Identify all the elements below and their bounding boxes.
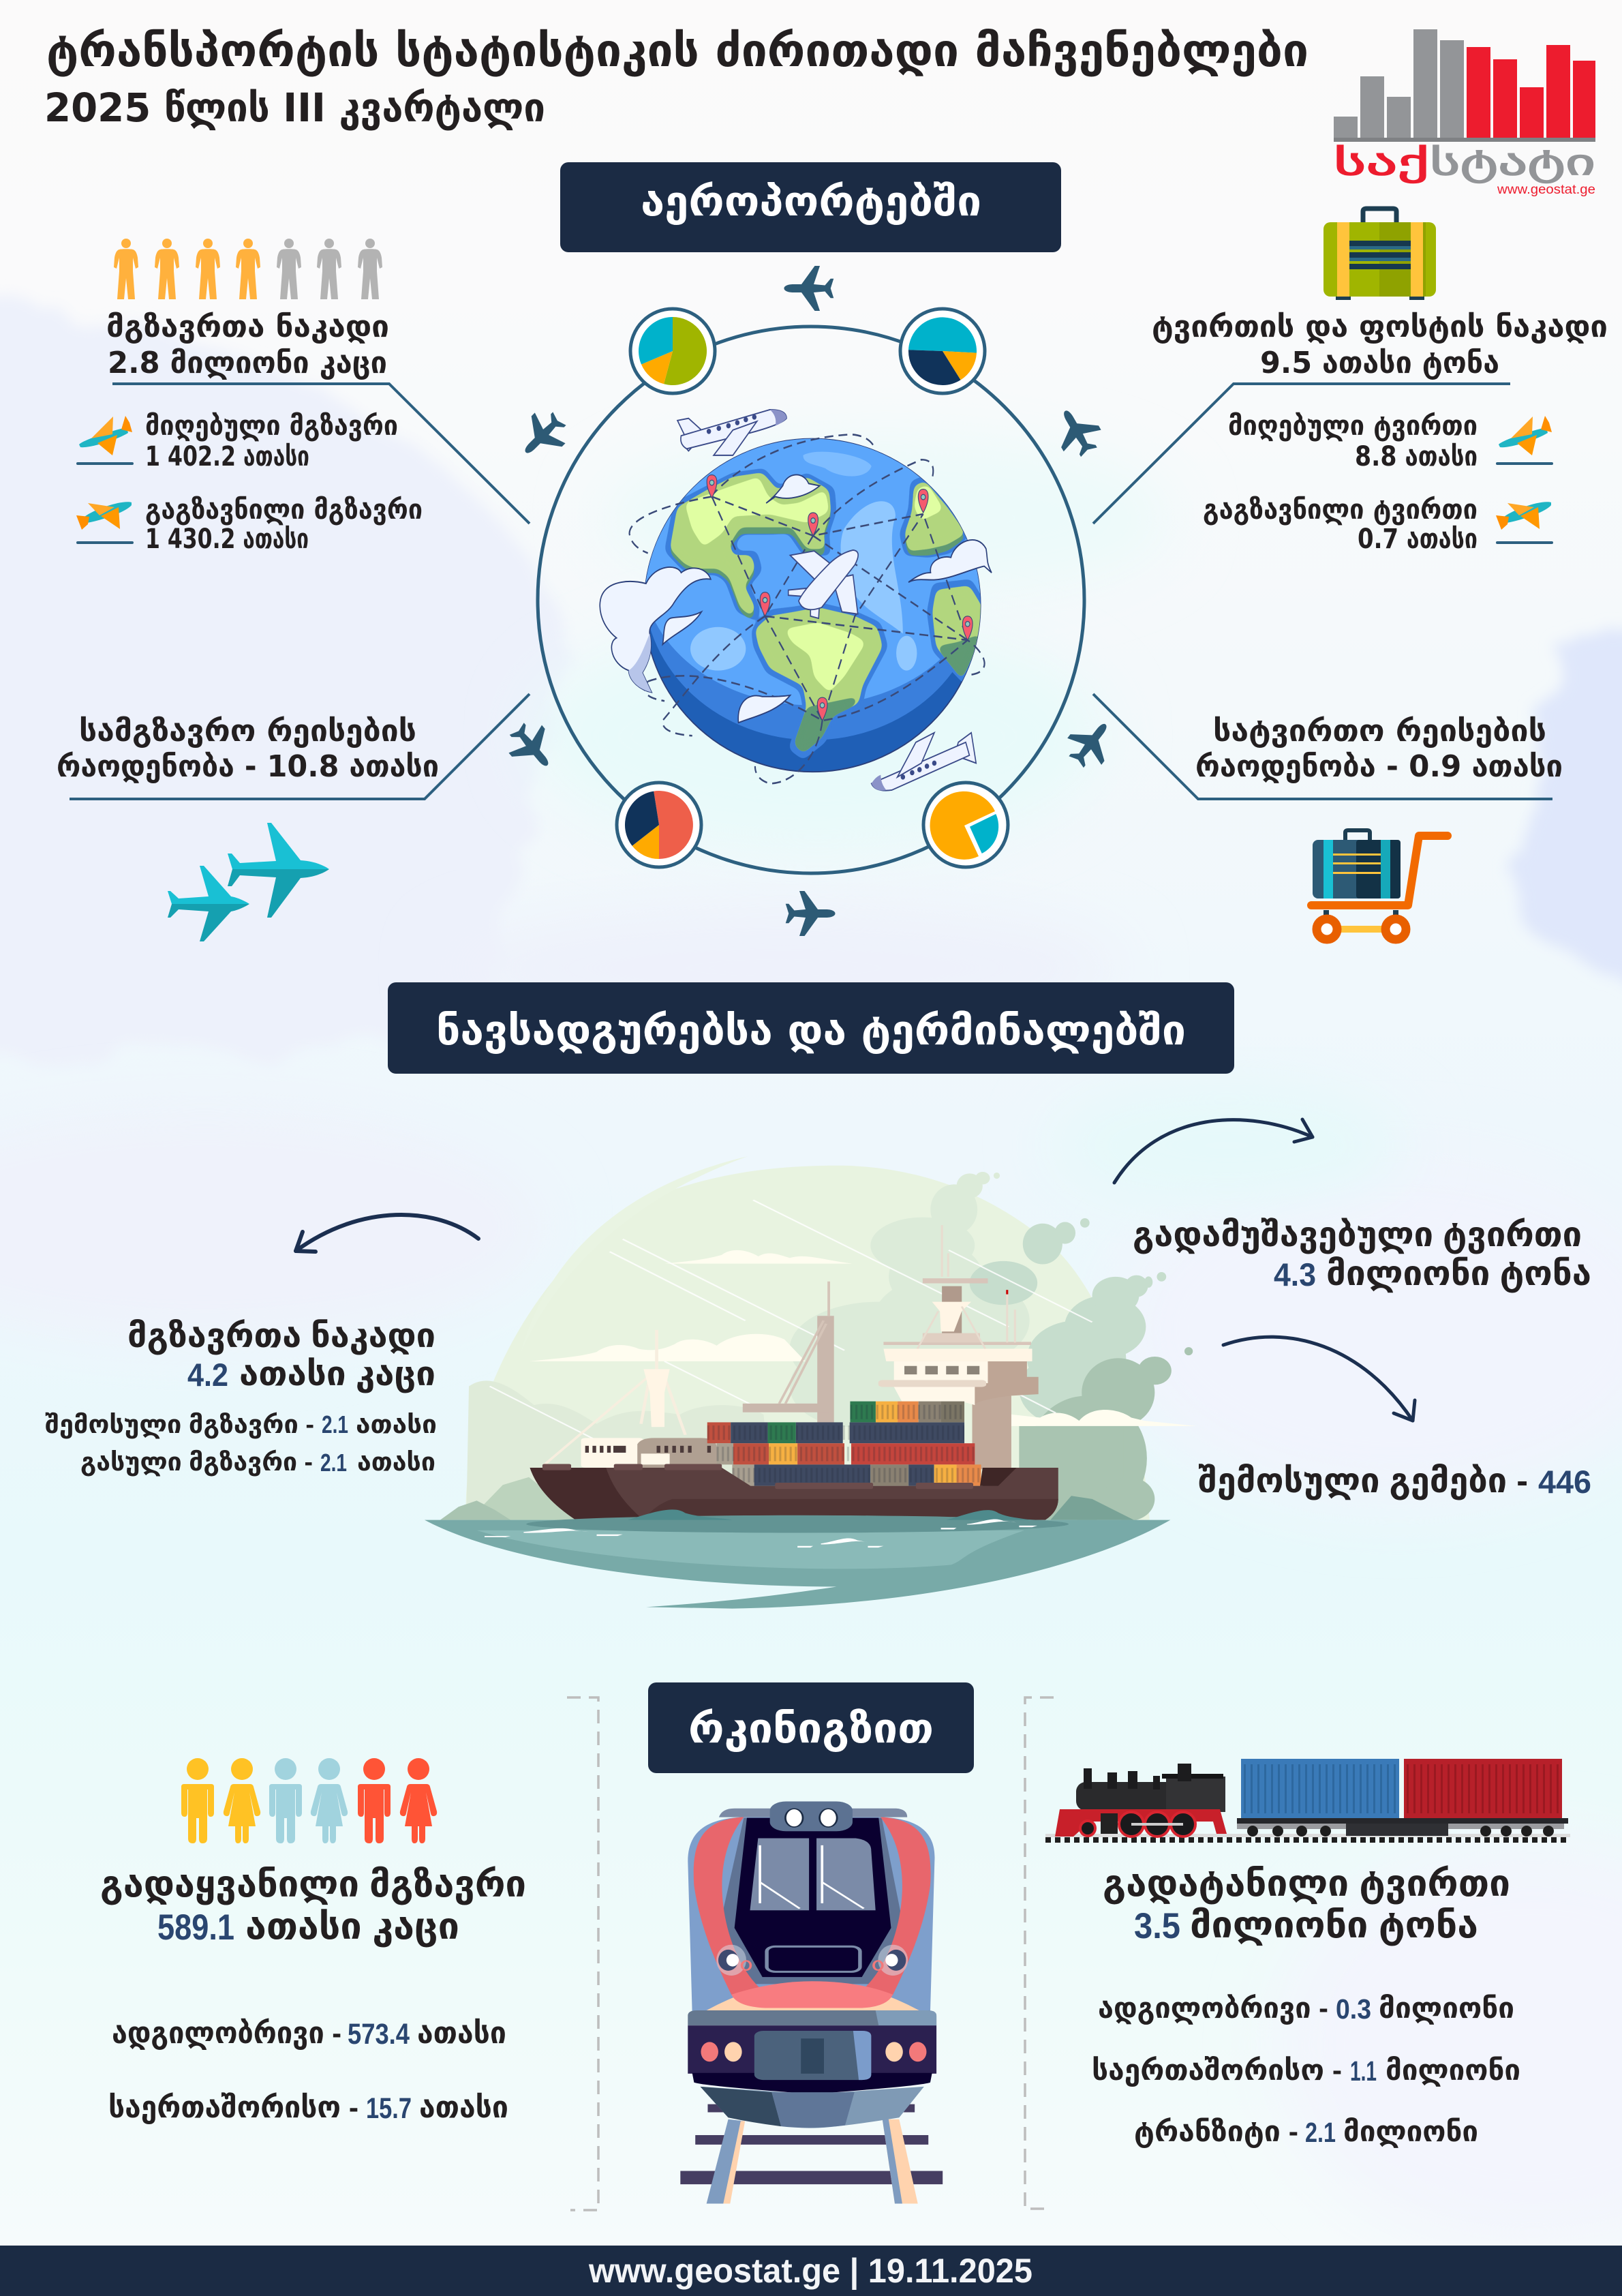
rail cargo text: მილიონი ტონა [1190, 1905, 1478, 1946]
bracket: right of rail heading [1025, 1697, 1054, 2209]
illustration: train front [680, 1801, 943, 2203]
vessels text: 446 [1538, 1464, 1591, 1500]
processed cargo text: 4.3 [1274, 1256, 1316, 1293]
processed cargo text: მილიონი ტონა [1326, 1254, 1591, 1293]
rail local cargo [1098, 1992, 1514, 2025]
rail international cargo: საერთაშორისო - [1092, 2054, 1342, 2087]
rail local cargo: მილიონი [1379, 1992, 1514, 2025]
rail international passengers: ათასი [419, 2091, 508, 2124]
footer: www.geostat.ge | 19.11.2025 [588, 2252, 1032, 2291]
port passenger text: შემოსული მგზავრი - [45, 1410, 314, 1439]
port passenger text: ათასი კაცი [239, 1356, 435, 1393]
logo: Geostat [1334, 29, 1595, 197]
port passenger text: 4.2 [187, 1357, 228, 1393]
port passenger text [45, 1318, 437, 1477]
icon: departing plane [76, 502, 134, 544]
arrived cargo text [1228, 410, 1478, 472]
heading: airports [560, 162, 1061, 252]
icon: passengers row [114, 239, 382, 299]
logo: Geostat: საქ [1334, 142, 1429, 183]
rail international passengers [108, 2091, 508, 2125]
arrow: to processed cargo [1114, 1119, 1313, 1183]
cargo and mail flow text: 9.5 ათასი ტონა [1260, 346, 1499, 380]
illustration: container ship [425, 1156, 1197, 1609]
rail local passengers: ადგილობრივი - [112, 2016, 341, 2050]
logo: Geostat: www.geostat.ge [1497, 183, 1595, 197]
bracket: left of rail heading [567, 1697, 598, 2210]
arrived passengers text: მიღებული მგზავრი [145, 410, 398, 442]
rail international cargo [1092, 2054, 1520, 2087]
heading: airports: აეროპორტებში [641, 178, 981, 226]
arrow: to vessels [1223, 1337, 1415, 1421]
ring around globe [538, 327, 1084, 873]
rail transit cargo: ტრანზიტი - [1134, 2115, 1298, 2148]
illustration: globe with routes [600, 410, 992, 791]
port passenger text: მგზავრთა ნაკადი [127, 1318, 435, 1355]
rail transit cargo [1134, 2115, 1478, 2148]
logo: Geostat: სტატი [1430, 142, 1595, 183]
port passenger text: ათასი [357, 1448, 435, 1476]
title: ტრანსპორტის სტატისტიკის ძირითადი მაჩვენებლები [46, 25, 1309, 77]
passenger flow text: 2.8 მილიონი კაცი [108, 346, 387, 380]
icon: arriving plane cargo [1496, 416, 1553, 465]
rail passengers text [100, 1864, 526, 1948]
pie badge: bottom left [617, 783, 701, 867]
departed passengers text [145, 494, 423, 555]
port passenger text: 2.1 [320, 1449, 347, 1477]
port passenger text: გასული მგზავრი - [80, 1448, 313, 1477]
departed passengers text: გაგზავნილი მგზავრი [145, 494, 423, 526]
processed cargo text: გადამუშავებული ტვირთი [1133, 1215, 1582, 1254]
passenger flow text: მგზავრთა ნაკადი [106, 309, 389, 344]
arrived passengers text [145, 410, 398, 472]
icon: orbit plane bottom [786, 891, 836, 936]
passenger flights text [57, 714, 439, 784]
pie badge: top left [630, 309, 715, 393]
arrived cargo text: 8.8 ათასი [1355, 441, 1478, 472]
leader line: cargo [1093, 384, 1510, 524]
cargo flights text: სატვირთო რეისების [1213, 714, 1546, 749]
heading: railway [648, 1682, 974, 1773]
arrived passengers text: 1 402.2 ათასი [145, 441, 309, 472]
vessels text: შემოსული გემები - [1198, 1462, 1528, 1500]
cargo and mail flow text [1152, 309, 1608, 380]
illustration: freight train [1045, 1759, 1570, 1840]
rail international passengers: 15.7 [366, 2092, 412, 2125]
port passenger text: 2.1 [322, 1410, 348, 1438]
icon: orbit plane upper left [510, 404, 575, 468]
rail international cargo: მილიონი [1386, 2054, 1520, 2087]
cargo flights text: რაოდენობა - 0.9 ათასი [1195, 749, 1563, 784]
pie badge: top right [900, 309, 985, 393]
rail transit cargo: 2.1 [1305, 2117, 1336, 2148]
rail passengers text: 589.1 [157, 1907, 234, 1948]
departed cargo text: 0.7 ათასი [1358, 524, 1478, 555]
icon: orbit plane upper right [1047, 400, 1107, 463]
leader line: passengers [112, 384, 530, 524]
cargo and mail flow text: ტვირთის და ფოსტის ნაკადი [1152, 309, 1608, 344]
heading: ports and terminals: ნავსადგურებსა და ტერმინალებში [436, 1007, 1186, 1055]
icon: departing plane cargo [1496, 502, 1553, 544]
rail cargo text: 3.5 [1134, 1906, 1180, 1946]
rail local cargo: ადგილობრივი - [1098, 1992, 1328, 2025]
passenger flights text: რაოდენობა - 10.8 ათასი [57, 749, 439, 784]
heading: ports and terminals [388, 982, 1234, 1074]
rail local passengers [112, 2016, 506, 2051]
icon: orbit plane lower right [1059, 711, 1122, 775]
rail local passengers: 573.4 [348, 2018, 410, 2051]
icon: luggage cart [1311, 830, 1448, 939]
pie badge: bottom right [923, 783, 1008, 867]
passenger flow text [106, 309, 389, 380]
icon: rail passengers [181, 1758, 437, 1843]
rail passengers text: გადაყვანილი მგზავრი [100, 1864, 526, 1905]
icon: orbit plane lower left [500, 715, 564, 779]
departed cargo text: გაგზავნილი ტვირთი [1203, 494, 1478, 526]
departed cargo text [1203, 494, 1478, 555]
rail local cargo: 0.3 [1336, 1993, 1371, 2025]
rail local passengers: ათასი [417, 2016, 506, 2050]
arrived cargo text: მიღებული ტვირთი [1228, 410, 1478, 442]
passenger flights text: სამგზავრო რეისების [79, 714, 416, 749]
icon: teal planes [168, 823, 329, 941]
heading: railway: რკინიგზით [688, 1705, 934, 1753]
leader line: passenger flights [70, 694, 530, 799]
footer [0, 2246, 1622, 2296]
departed passengers text: 1 430.2 ათასი [145, 524, 309, 555]
rail international passengers: საერთაშორისო - [108, 2091, 358, 2124]
processed cargo text [1133, 1215, 1591, 1293]
arrow: to passenger flow [296, 1215, 478, 1252]
rail international cargo: 1.1 [1350, 2055, 1377, 2087]
subtitle: 2025 წლის III კვარტალი [44, 85, 545, 131]
icon: orbit plane top [784, 266, 833, 311]
leader line: cargo flights [1093, 694, 1552, 799]
rail cargo text [1103, 1863, 1510, 1946]
icon: arriving plane [76, 416, 134, 465]
rail transit cargo: მილიონი [1343, 2115, 1478, 2148]
port passenger text: ათასი [356, 1410, 437, 1438]
rail passengers text: ათასი კაცი [245, 1906, 459, 1947]
icon: green suitcase [1323, 209, 1436, 300]
cargo flights text [1195, 714, 1563, 784]
rail cargo text: გადატანილი ტვირთი [1103, 1863, 1510, 1904]
